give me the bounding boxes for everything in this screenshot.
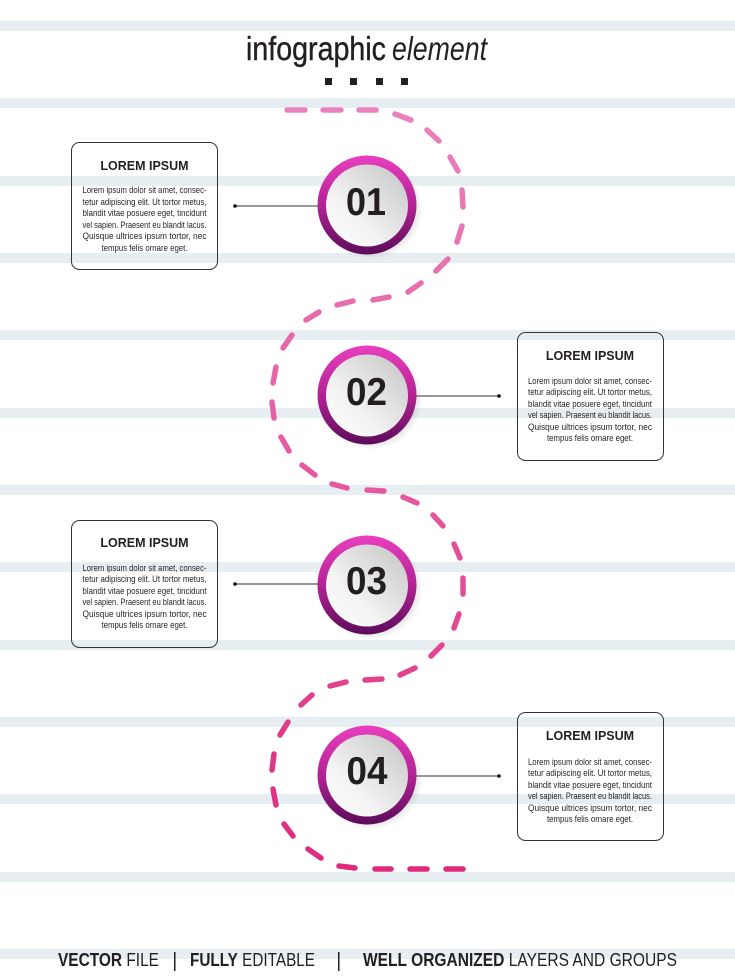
title: element: [392, 30, 488, 67]
step 4 heading: LOREM IPSUM: [546, 729, 634, 743]
step 2 body text: blandit vitae posuere eget, tincidunt: [528, 399, 652, 410]
step 2 body text: vel sapien. Praesent eu blandit lacus.: [528, 410, 652, 421]
step 3 body text: vel sapien. Praesent eu blandit lacus.: [82, 597, 206, 608]
title: [246, 30, 488, 67]
step 3 body text: Quisque ultrices ipsum tortor, nec: [82, 609, 207, 620]
step 4 body text: Lorem ipsum dolor sit amet, consec-: [528, 757, 652, 768]
title: infographic: [246, 30, 386, 67]
step 1 body text: Lorem ipsum dolor sit amet, consec-: [82, 185, 206, 196]
step 2 body text: Lorem ipsum dolor sit amet, consec-: [528, 376, 652, 387]
footer text: WELL ORGANIZED LAYERS AND GROUPS: [363, 949, 677, 970]
step 4 body text: vel sapien. Praesent eu blandit lacus.: [528, 791, 652, 802]
panel: step 1 text box: [72, 142, 218, 270]
step 3 body text: tetur adipiscing elit. Ut tortor metus,: [82, 574, 206, 585]
connector 1: [233, 204, 320, 208]
badge 03: [318, 536, 423, 640]
footer text: FULLY EDITABLE: [190, 949, 315, 970]
step 3 heading: LOREM IPSUM: [100, 536, 189, 550]
connector 2: [414, 394, 501, 398]
step 2 body text: tetur adipiscing elit. Ut tortor metus,: [528, 387, 652, 398]
step 1 body text: blandit vitae posuere eget, tincidunt: [82, 208, 207, 219]
step 4 body text: tetur adipiscing elit. Ut tortor metus,: [528, 768, 652, 779]
panel: step 4 text box: [518, 712, 664, 840]
badge 04: [318, 726, 423, 830]
step 1 body text: Quisque ultrices ipsum tortor, nec: [82, 231, 207, 242]
step 1 body text: tempus felis ornare eget.: [102, 243, 188, 254]
step 4 body text: Quisque ultrices ipsum tortor, nec: [528, 803, 652, 814]
connector 4: [414, 774, 501, 778]
badge 04: 04: [346, 750, 388, 793]
step 2 heading: LOREM IPSUM: [546, 349, 634, 363]
step 4 body text: [528, 757, 652, 825]
step 2 body text: [528, 376, 652, 444]
dashed winding path: [272, 110, 463, 869]
title dots: [325, 78, 408, 85]
step 4 body text: tempus felis ornare eget.: [547, 814, 633, 825]
step 1 body text: tetur adipiscing elit. Ut tortor metus,: [82, 197, 206, 208]
step 1 body text: [82, 185, 207, 254]
step 1 heading: LOREM IPSUM: [100, 159, 189, 173]
footer text: [58, 949, 677, 971]
step 3 body text: [82, 563, 207, 631]
badge 02: 02: [346, 371, 387, 414]
panel: step 2 text box: [518, 332, 664, 460]
step 1 body text: vel sapien. Praesent eu blandit lacus.: [82, 220, 206, 231]
step 3 body text: blandit vitae posuere eget, tincidunt: [82, 586, 207, 597]
step 2 body text: Quisque ultrices ipsum tortor, nec: [528, 422, 652, 433]
step 3 body text: Lorem ipsum dolor sit amet, consec-: [82, 563, 206, 574]
badge 03: 03: [346, 560, 387, 603]
step 4 body text: blandit vitae posuere eget, tincidunt: [528, 780, 652, 791]
step 3 body text: tempus felis ornare eget.: [102, 620, 188, 631]
badge 01: [318, 156, 423, 260]
step 2 body text: tempus felis ornare eget.: [547, 433, 633, 444]
connector 3: [233, 582, 320, 586]
badge 01: 01: [346, 181, 386, 224]
footer text: VECTOR FILE: [58, 949, 159, 970]
panel: step 3 text box: [72, 520, 218, 648]
badge 02: [318, 346, 423, 450]
